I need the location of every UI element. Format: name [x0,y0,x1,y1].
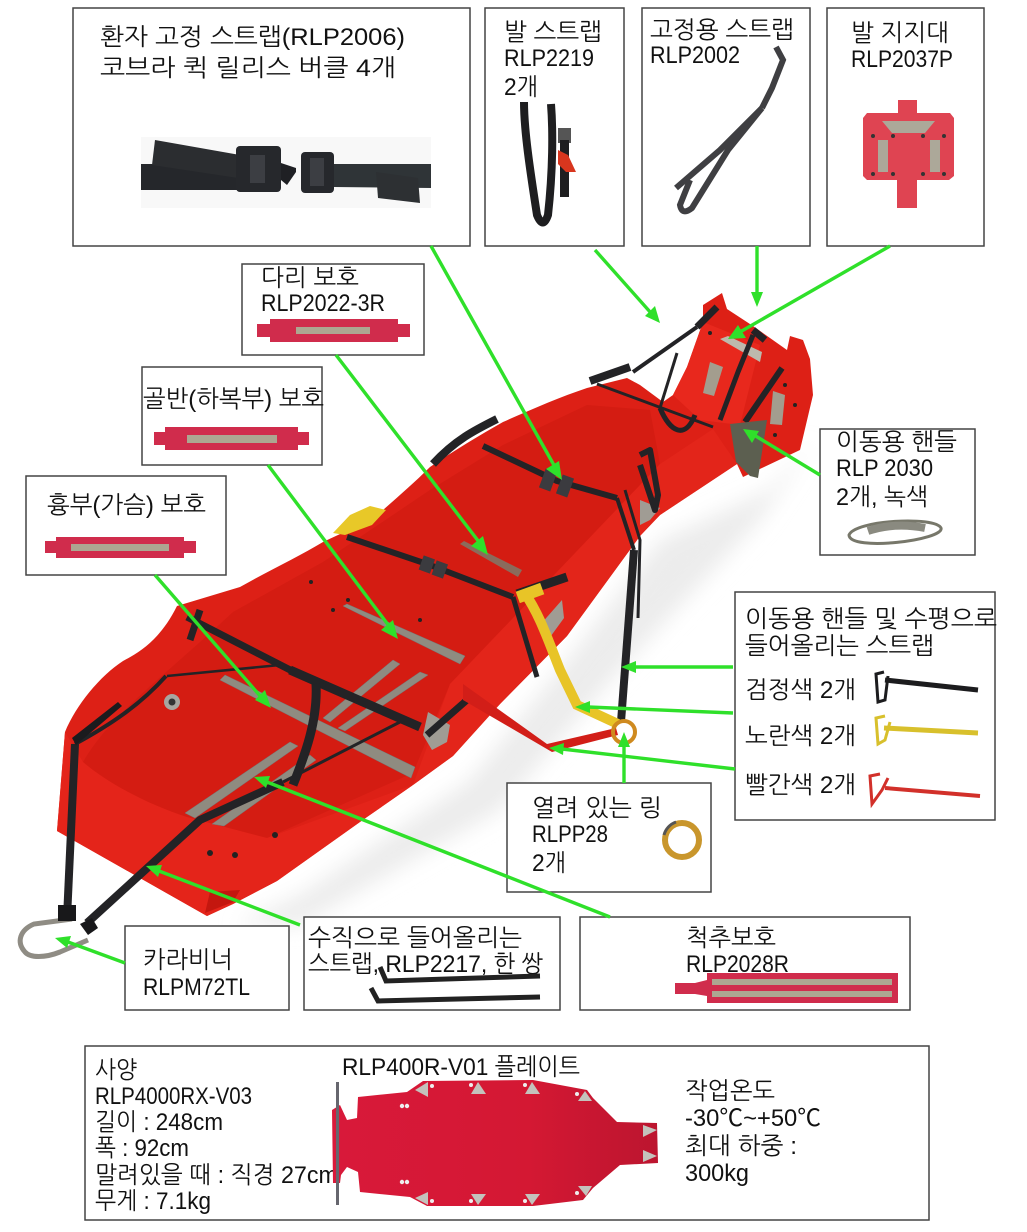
panel: carrying handle: 이동용 핸들 [836,429,957,456]
arrow: vertical lift strap [146,865,300,925]
panel: chest protection [26,476,226,575]
text block: specs: RLP4000RX-V03 [95,1083,252,1110]
side wall flap [413,429,737,785]
panel: foot strap: 2개 [504,74,538,101]
grey hardware plates [423,712,450,750]
buckles [419,469,574,579]
panel: vertical lift straps: 수직으로 들어올리는 [308,925,522,952]
text block: temperature and load [685,1078,821,1187]
icon: leg pad [257,319,410,342]
panel: foot strap: 발 스트랩 [504,19,602,46]
black straps [67,307,782,923]
arrow: red strap [549,743,735,769]
panel: anchor strap: RLP2002 [650,42,740,69]
icon: pair of straps [371,967,540,1001]
panel: leg protection: RLP2022-3R [261,290,385,317]
icon: foot plate [863,100,954,208]
icon: gold ring [664,822,699,857]
arrow: carrying handle [743,429,820,475]
panel: pelvis protection: 골반(하복부) 보호 [143,386,324,413]
panel: patient straps [73,8,470,246]
stretcher photo [20,293,815,956]
panel: carrying handle [820,429,975,555]
panel: anchor strap: 고정용 스트랩 [650,17,794,44]
transport handle green-grey [730,420,767,478]
panel: carabiner: RLPM72TL [143,974,250,1001]
panel: foot strap [485,8,624,246]
panel: patient straps: 코브라 퀵 릴리스 버클 4개 [100,55,396,82]
arrow: black strap [621,661,733,673]
arrow: patient strap to buckle [431,246,562,480]
rivets [207,331,797,858]
panel: open ring: 열려 있는 링 [532,795,662,822]
icon: handle loop [849,521,941,543]
panel: carabiner: 카라비너 [143,947,233,974]
icon: yellow strap [876,716,978,744]
metal strips [220,675,415,778]
arrow: yellow strap [575,701,733,713]
text block: specs: 무게 : 7.1kg [95,1188,211,1215]
inner floor shade [83,405,660,838]
yellow top tie [333,506,386,535]
arrow: carabiner [55,936,125,963]
handles [640,450,658,510]
plate heading: RLP400R-V01 플레이트 [342,1054,580,1081]
icon: plate [332,1080,658,1206]
icon: spine pad [675,973,898,1003]
head wall highlight [57,732,413,916]
arrow: foot strap [595,250,660,323]
text block: temperature and load: 작업온도 [685,1078,775,1105]
panel: carrying handle: 2개, 녹색 [836,484,928,511]
panel: lift straps: 이동용 핸들 및 수평으로 [745,606,997,633]
arrow: chest protection [155,575,271,708]
icon: chest pad [45,537,196,558]
panel: spine protection: 척추보호 [686,925,776,952]
panel: foot support: 발 지지대 [851,20,949,47]
icon: red strap [870,774,980,804]
panel: foot support: RLP2037P [851,46,953,73]
icon: quick release buckle strap [141,137,431,208]
text block: specs: 폭 : 92cm [95,1135,189,1162]
panel: leg protection: 다리 보호 [261,265,359,292]
panel: patient straps: 환자 고정 스트랩(RLP2006) [100,24,405,51]
panel: lift straps: 빨간색 2개 [745,772,856,799]
icon: anchor strap [676,47,783,211]
text block: specs: 길이 : 248cm [95,1109,223,1136]
text block: temperature and load: 최대 하중 : [685,1133,797,1160]
panel: carrying handle: RLP 2030 [836,455,933,482]
panel: specifications [85,1046,929,1220]
panel: vertical lift straps [304,917,560,1010]
arrow: spine protection [254,776,610,917]
text block: specs: 말려있을 때 : 직경 27cm [95,1162,338,1189]
icon: foot strap [524,102,576,222]
text block: temperature and load: 300kg [685,1160,749,1187]
panel: spine protection [580,917,910,1010]
panel: pelvis protection [142,367,324,465]
panel: lift straps [735,592,997,820]
foot plate shade [673,322,760,425]
carabiner [20,919,88,956]
red strap [463,684,618,752]
icon: pelvis pad [154,427,309,450]
panel: foot support [827,8,984,246]
text block: specs: 사양 [95,1057,137,1084]
open ring on stretcher [613,721,635,743]
arrow: anchor strap [751,246,763,307]
panel: open ring [507,783,711,892]
panel: open ring: 2개 [532,850,566,877]
yellow strap [524,592,618,724]
panel: vertical lift straps: 스트랩, RLP2217, 한 쌍 [308,951,543,978]
text block: temperature and load: -30℃~+50℃ [685,1105,821,1132]
panel: leg protection [242,264,424,355]
arrow: open ring [618,732,630,783]
panel: lift straps: 들어올리는 스트랩 [745,633,934,660]
panel: lift straps: 검정색 2개 [745,677,856,704]
panel: anchor strap [642,8,810,246]
panel: carabiner [125,926,289,1010]
panel: spine protection: RLP2028R [686,951,789,978]
panel: foot strap: RLP2219 [504,45,594,72]
arrow: leg protection [336,355,488,555]
arrow: foot support [728,246,890,339]
panel: chest protection: 흉부(가슴) 보호 [47,492,206,519]
arrow: pelvis protection [268,465,398,639]
text block: specs [95,1057,338,1215]
panel: lift straps: 노란색 2개 [745,723,856,750]
icon: black strap [876,672,978,702]
panel: open ring: RLPP28 [532,821,608,848]
stretcher body [57,293,813,916]
